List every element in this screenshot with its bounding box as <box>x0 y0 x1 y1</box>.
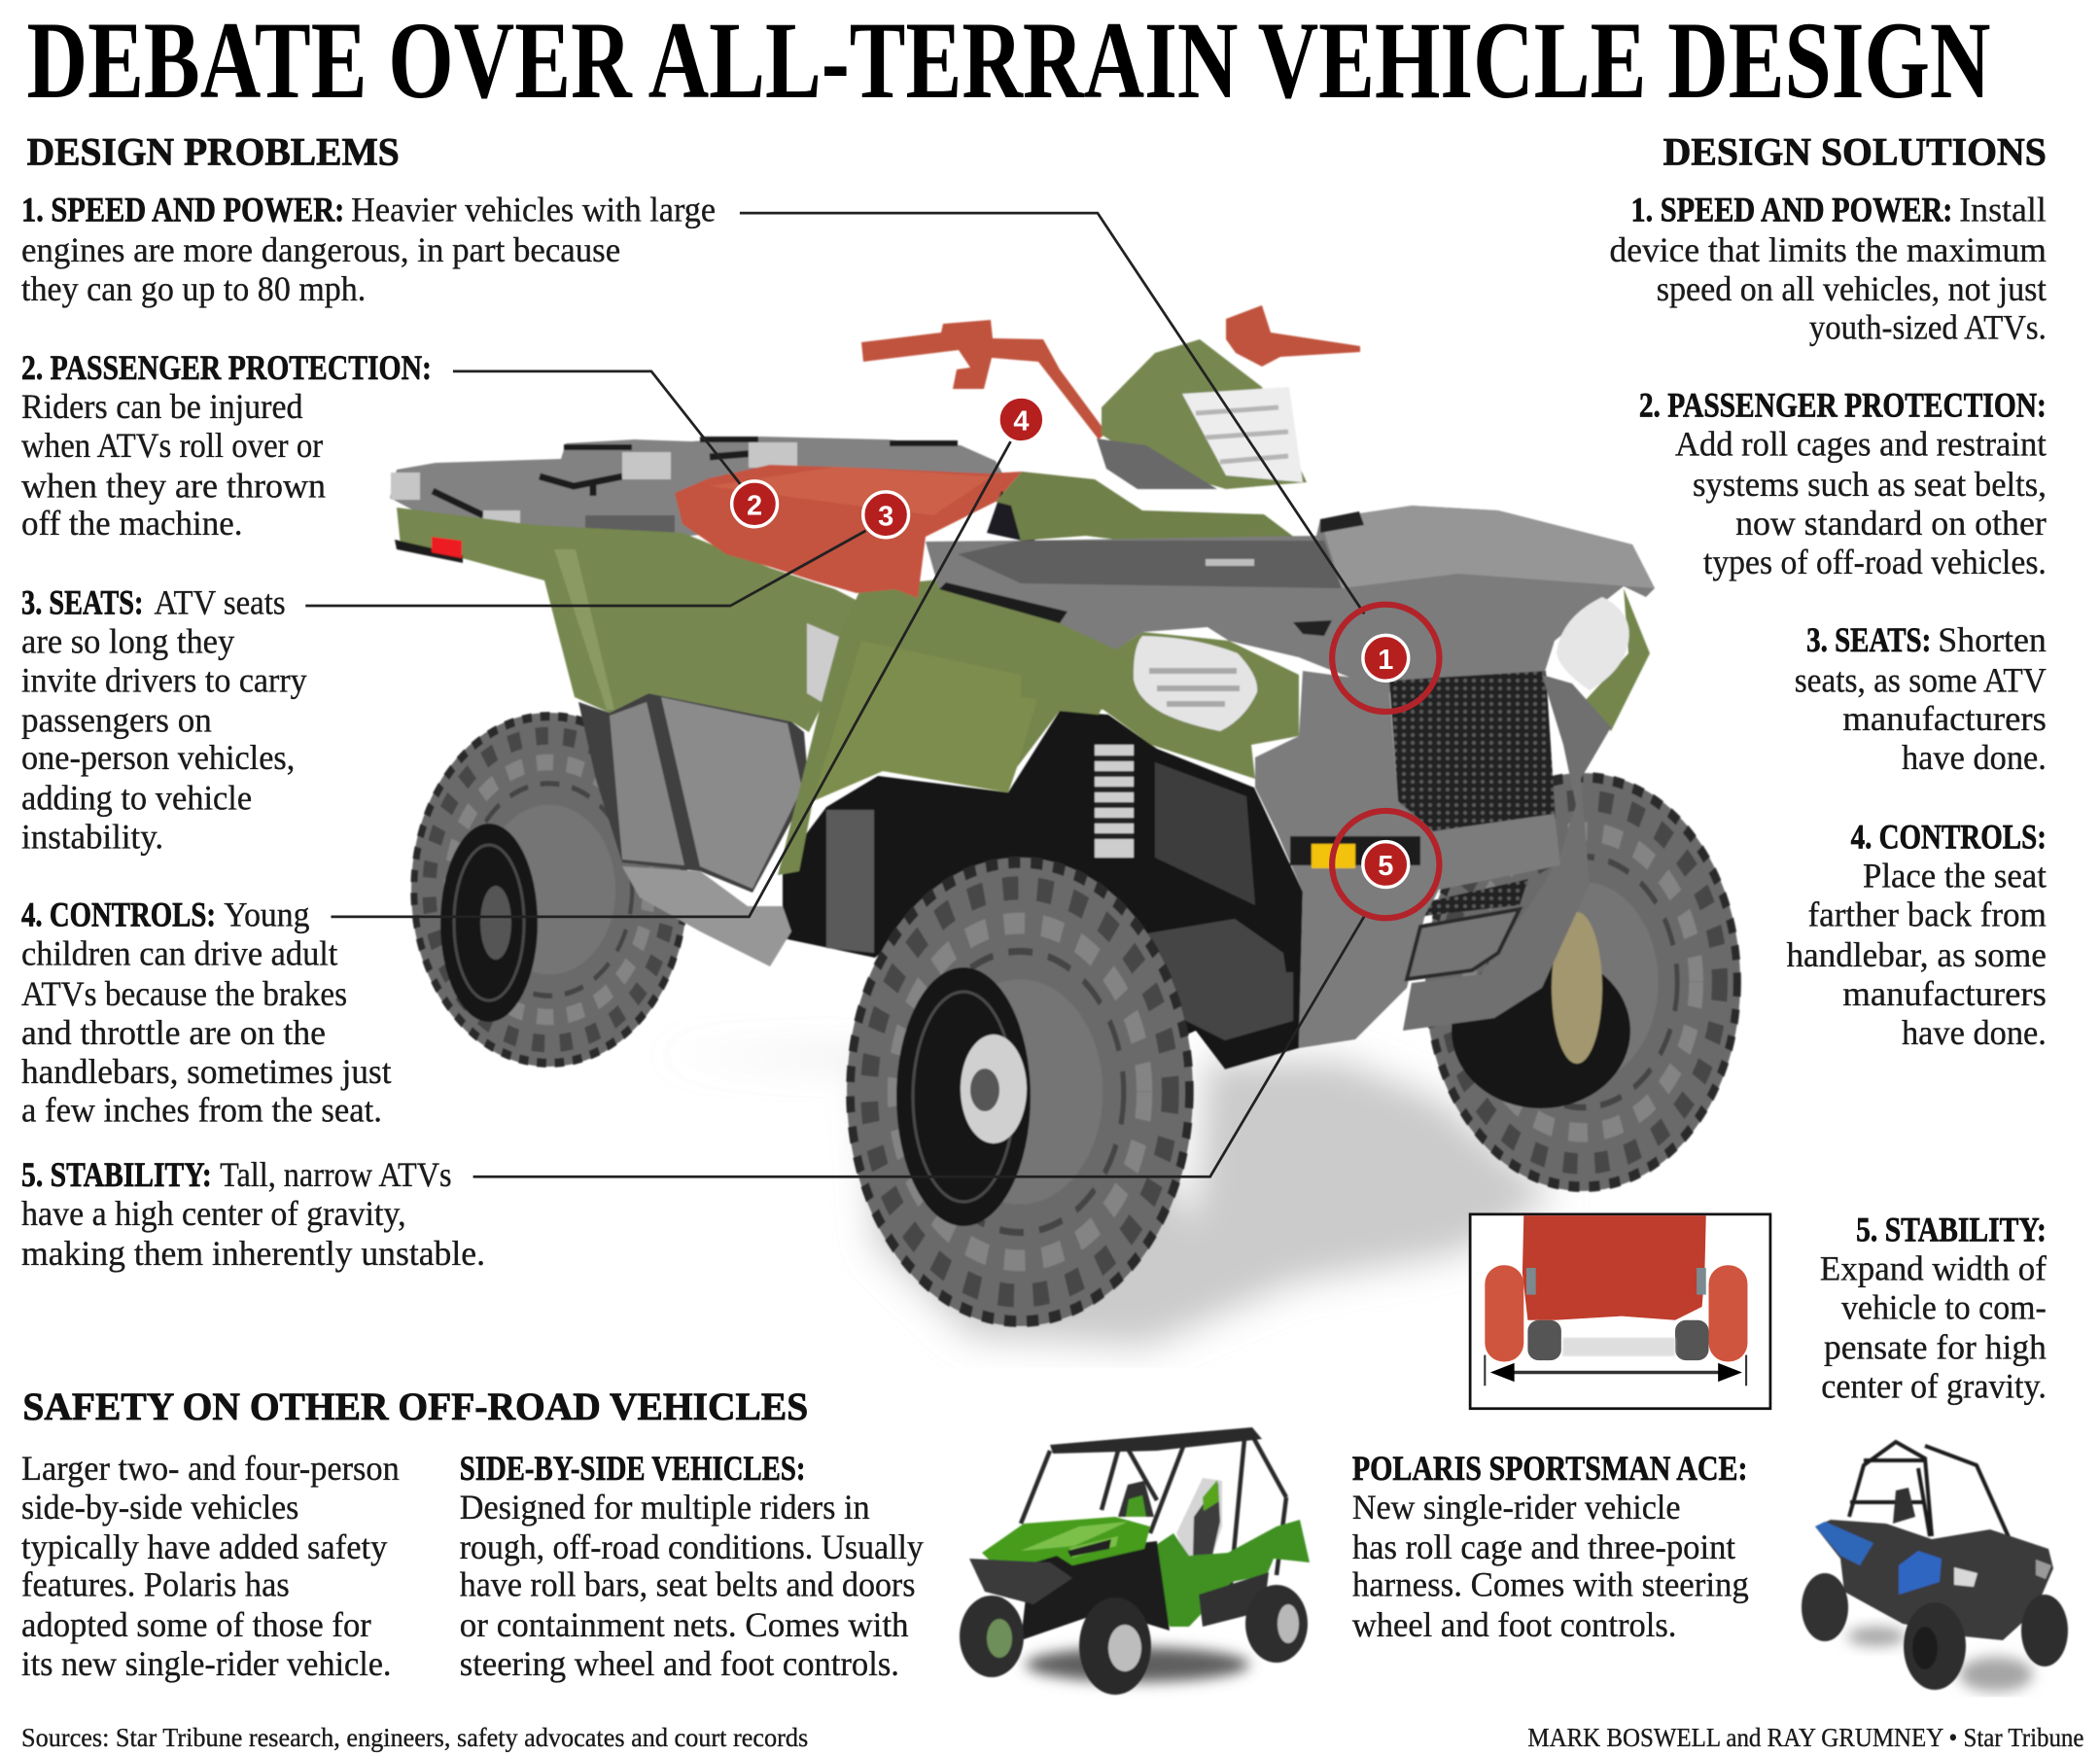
inset inner tyres <box>1526 1268 1708 1360</box>
highlight ring 1 <box>1332 605 1439 712</box>
solution 2: passenger protection: types of off-road vehicles. <box>1703 543 2047 581</box>
rear body: green fender <box>397 508 861 732</box>
side-by-side vehicles text: Designed for multiple riders in <box>460 1488 870 1527</box>
inset vehicle body <box>1522 1215 1706 1320</box>
solution 4: controls: farther back from <box>1808 895 2047 933</box>
front fender and left headlight <box>1021 618 1299 779</box>
solution 3: seats: 3. SEATS: <box>1806 620 1931 659</box>
fender highlight <box>554 549 614 710</box>
solution 2: passenger protection: Add roll cages and restraint <box>1675 425 2047 464</box>
solution 1: speed and power <box>1609 190 2047 347</box>
rear dark side panel <box>578 693 809 893</box>
black gap below tank <box>987 491 1060 543</box>
heading: design solutions: DESIGN SOLUTIONS <box>1663 130 2047 174</box>
polaris sportsman ace text: harness. Comes with steering <box>1352 1565 1749 1604</box>
problem 3: seats: invite drivers to carry <box>21 660 307 699</box>
solution 4: controls <box>1786 818 2047 1052</box>
polaris sportsman ace text <box>1352 1449 1749 1644</box>
far side green fender <box>1585 588 1650 731</box>
rear rack <box>390 437 1004 542</box>
illustration: all-terrain vehicle <box>390 305 1740 1347</box>
solution 4: controls: Place the seat <box>1863 857 2047 895</box>
side-by-side vehicles text: rough, off-road conditions. Usually <box>460 1527 924 1566</box>
problem 2: passenger protection: when ATVs roll over or <box>21 426 323 465</box>
solution 5: stability: 5. STABILITY: <box>1856 1210 2047 1248</box>
marker 1: 1 <box>1378 645 1393 676</box>
marker 4: 4 <box>1013 405 1029 437</box>
solution 1: speed and power: speed on all vehicles, not just <box>1657 269 2047 308</box>
problem 3: seats: passengers on <box>21 701 212 740</box>
solution 4: controls: have done. <box>1902 1013 2047 1052</box>
problem 2: passenger protection: when they are thrown <box>21 466 326 505</box>
front fascia <box>1255 671 1560 1048</box>
solution 1: speed and power: device that limits the maximum <box>1609 230 2047 269</box>
solution 3: seats: have done. <box>1902 738 2047 777</box>
solution 2: passenger protection: systems such as seat belts, <box>1693 465 2047 504</box>
solution 2: passenger protection: now standard on other <box>1735 504 2047 543</box>
leader lines <box>305 213 1366 1176</box>
polaris sportsman ace text: wheel and foot controls. <box>1352 1605 1676 1644</box>
illustration: blue polaris ace <box>1802 1442 2068 1692</box>
front strut <box>1403 675 1611 1031</box>
problem 5: stability: 5. STABILITY: <box>21 1155 212 1194</box>
problem 2: passenger protection <box>21 348 432 543</box>
hood: grey front deck <box>926 506 1655 692</box>
highlight ring 5 <box>1332 811 1439 918</box>
problem 5: stability: have a high center of gravity, <box>21 1194 406 1233</box>
problem 1: speed and power: engines are more dangerous, in part because <box>21 230 620 269</box>
width arrow <box>1485 1355 1746 1386</box>
problem 1: speed and power <box>21 190 716 308</box>
inset: wider wheelbase diagram <box>1470 1214 1770 1409</box>
solution 5: stability <box>1820 1210 2047 1406</box>
solution 3: seats <box>1795 620 2047 777</box>
side-by-side vehicles text: have roll bars, seat belts and doors <box>460 1565 915 1604</box>
solution 5: stability: pensate for high <box>1824 1328 2047 1367</box>
polaris sportsman ace text: POLARIS SPORTSMAN ACE: <box>1352 1449 1747 1488</box>
lower machinery pieces <box>1147 919 1293 1040</box>
problem 3: seats: are so long they <box>21 621 234 660</box>
marker 1 <box>1363 635 1409 681</box>
marker 2: 2 <box>747 490 762 521</box>
intro text: side-by-side vehicles <box>21 1488 298 1527</box>
intro text: adopted some of those for <box>21 1605 371 1644</box>
illustration: green side-by-side vehicle <box>960 1427 1310 1695</box>
problem 5: stability <box>21 1155 485 1273</box>
solution 5: stability: center of gravity. <box>1821 1367 2047 1406</box>
problem 3: seats: instability. <box>21 818 163 857</box>
side-by-side vehicles text: steering wheel and foot controls. <box>460 1644 899 1683</box>
problem 4: controls: 4. CONTROLS: <box>21 895 216 933</box>
radiator side panel <box>826 810 874 953</box>
grille <box>1389 671 1556 836</box>
footrest <box>622 866 791 966</box>
inset expanded red wheels <box>1485 1265 1747 1361</box>
problem 4: controls <box>21 895 392 1130</box>
side vent <box>807 623 839 702</box>
problem 2: passenger protection: off the machine. <box>21 504 242 543</box>
side-by-side vehicles text: or containment nets. Comes with <box>460 1605 909 1644</box>
marker 5 <box>1363 842 1409 888</box>
engine side plate <box>1155 762 1255 905</box>
solution 1: speed and power: youth-sized ATVs. <box>1809 308 2047 347</box>
intro text: Larger two- and four-person <box>21 1449 400 1488</box>
problem 4: controls: ATVs because the brakes <box>21 974 347 1013</box>
section heading: SAFETY ON OTHER OFF-ROAD VEHICLES <box>22 1385 808 1428</box>
intro text: its new single-rider vehicle. <box>21 1644 392 1683</box>
problem 3: seats: adding to vehicle <box>21 779 252 818</box>
intro text <box>21 1449 400 1683</box>
problem 1: speed and power: Heavier vehicles with large <box>351 190 716 228</box>
red seat <box>675 465 1022 598</box>
problem 4: controls: children can drive adult <box>21 933 337 972</box>
front-right headlight <box>1557 597 1629 690</box>
polaris sportsman ace text: New single-rider vehicle <box>1352 1488 1681 1527</box>
rear wheel <box>411 713 687 1067</box>
problem 2: passenger protection: 2. PASSENGER PROTECTION: <box>21 348 432 387</box>
solution 4: controls: handlebar, as some <box>1786 935 2047 974</box>
side-by-side vehicles text: SIDE-BY-SIDE VEHICLES: <box>460 1449 805 1488</box>
problem 5: stability: making them inherently unstable. <box>21 1234 485 1273</box>
headlight pod <box>1097 339 1307 489</box>
underbody machinery <box>783 711 1303 1070</box>
centre green body <box>778 579 1128 875</box>
intro text: typically have added safety <box>21 1527 387 1566</box>
problem 4: controls: Young <box>224 895 309 933</box>
panel: design solutions <box>1609 130 2047 1406</box>
solution 1: speed and power: 1. SPEED AND POWER: <box>1631 190 1952 228</box>
marker 4 <box>998 397 1044 442</box>
problem 1: speed and power: they can go up to 80 mph. <box>21 269 366 308</box>
near front wheel <box>847 858 1193 1326</box>
marker 5: 5 <box>1378 851 1393 882</box>
side-by-side vehicles text <box>460 1449 924 1683</box>
marker 3 <box>863 492 909 538</box>
problem 4: controls: handlebars, sometimes just <box>21 1052 392 1091</box>
source note: Sources: Star Tribune research, engineers, safety advocates and court records <box>21 1722 808 1752</box>
problem 2: passenger protection: Riders can be injured <box>21 387 303 426</box>
solution 4: controls: manufacturers <box>1842 974 2047 1013</box>
panel: design problems <box>21 130 716 1273</box>
intro text: features. Polaris has <box>21 1565 290 1604</box>
problem 5: stability: Tall, narrow ATVs <box>220 1155 452 1194</box>
solution 3: seats: Shorten <box>1938 620 2047 659</box>
problem 3: seats: 3. SEATS: <box>21 582 143 621</box>
solution 3: seats: manufacturers <box>1842 699 2047 738</box>
problem 3: seats: one-person vehicles, <box>21 738 295 777</box>
tail light <box>395 537 463 563</box>
far front wheel <box>1425 773 1740 1191</box>
polaris sportsman ace text: has roll cage and three-point <box>1352 1527 1735 1566</box>
solution 2: passenger protection <box>1639 386 2047 581</box>
ground shadow <box>661 1055 1556 1347</box>
problem 3: seats: ATV seats <box>155 582 286 621</box>
marker 3: 3 <box>878 501 893 532</box>
solution 5: stability: vehicle to com- <box>1841 1287 2047 1326</box>
heading: design problems: DESIGN PROBLEMS <box>27 130 400 174</box>
problem 3: seats <box>21 582 307 857</box>
solution 1: speed and power: Install <box>1959 190 2047 228</box>
tank: green behind handlebar <box>996 472 1299 549</box>
problem 1: speed and power: 1. SPEED AND POWER: <box>21 190 344 228</box>
problem 4: controls: and throttle are on the <box>21 1013 326 1052</box>
problem 4: controls: a few inches from the seat. <box>21 1091 382 1130</box>
handlebar and hand controls <box>861 305 1360 439</box>
solution 3: seats: seats, as some ATV <box>1795 660 2047 699</box>
solution 5: stability: Expand width of <box>1820 1248 2047 1287</box>
lit green panel <box>813 641 1043 801</box>
panel: safety on other off-road vehicles text <box>21 1385 1749 1683</box>
solution 4: controls: 4. CONTROLS: <box>1851 818 2047 857</box>
marker 2 <box>732 481 777 527</box>
suspension spring <box>1095 745 1134 858</box>
